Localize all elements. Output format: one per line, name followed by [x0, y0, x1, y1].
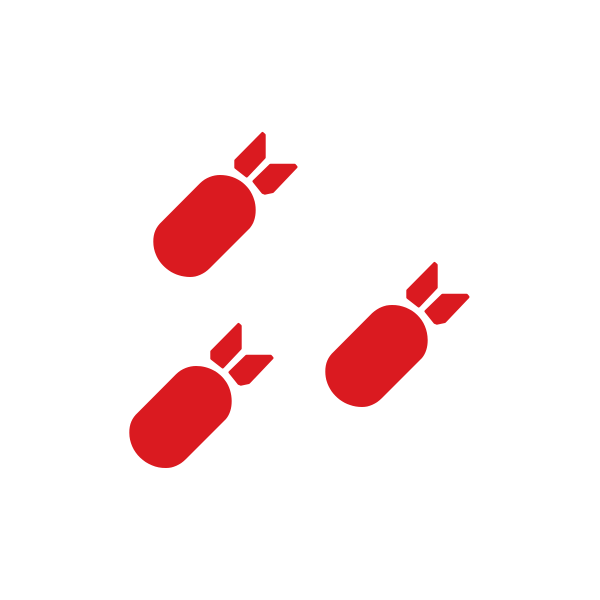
icon: bomb top left	[153, 134, 296, 277]
icon: bomb bottom left	[129, 324, 272, 468]
icon: bomb right	[325, 264, 468, 407]
